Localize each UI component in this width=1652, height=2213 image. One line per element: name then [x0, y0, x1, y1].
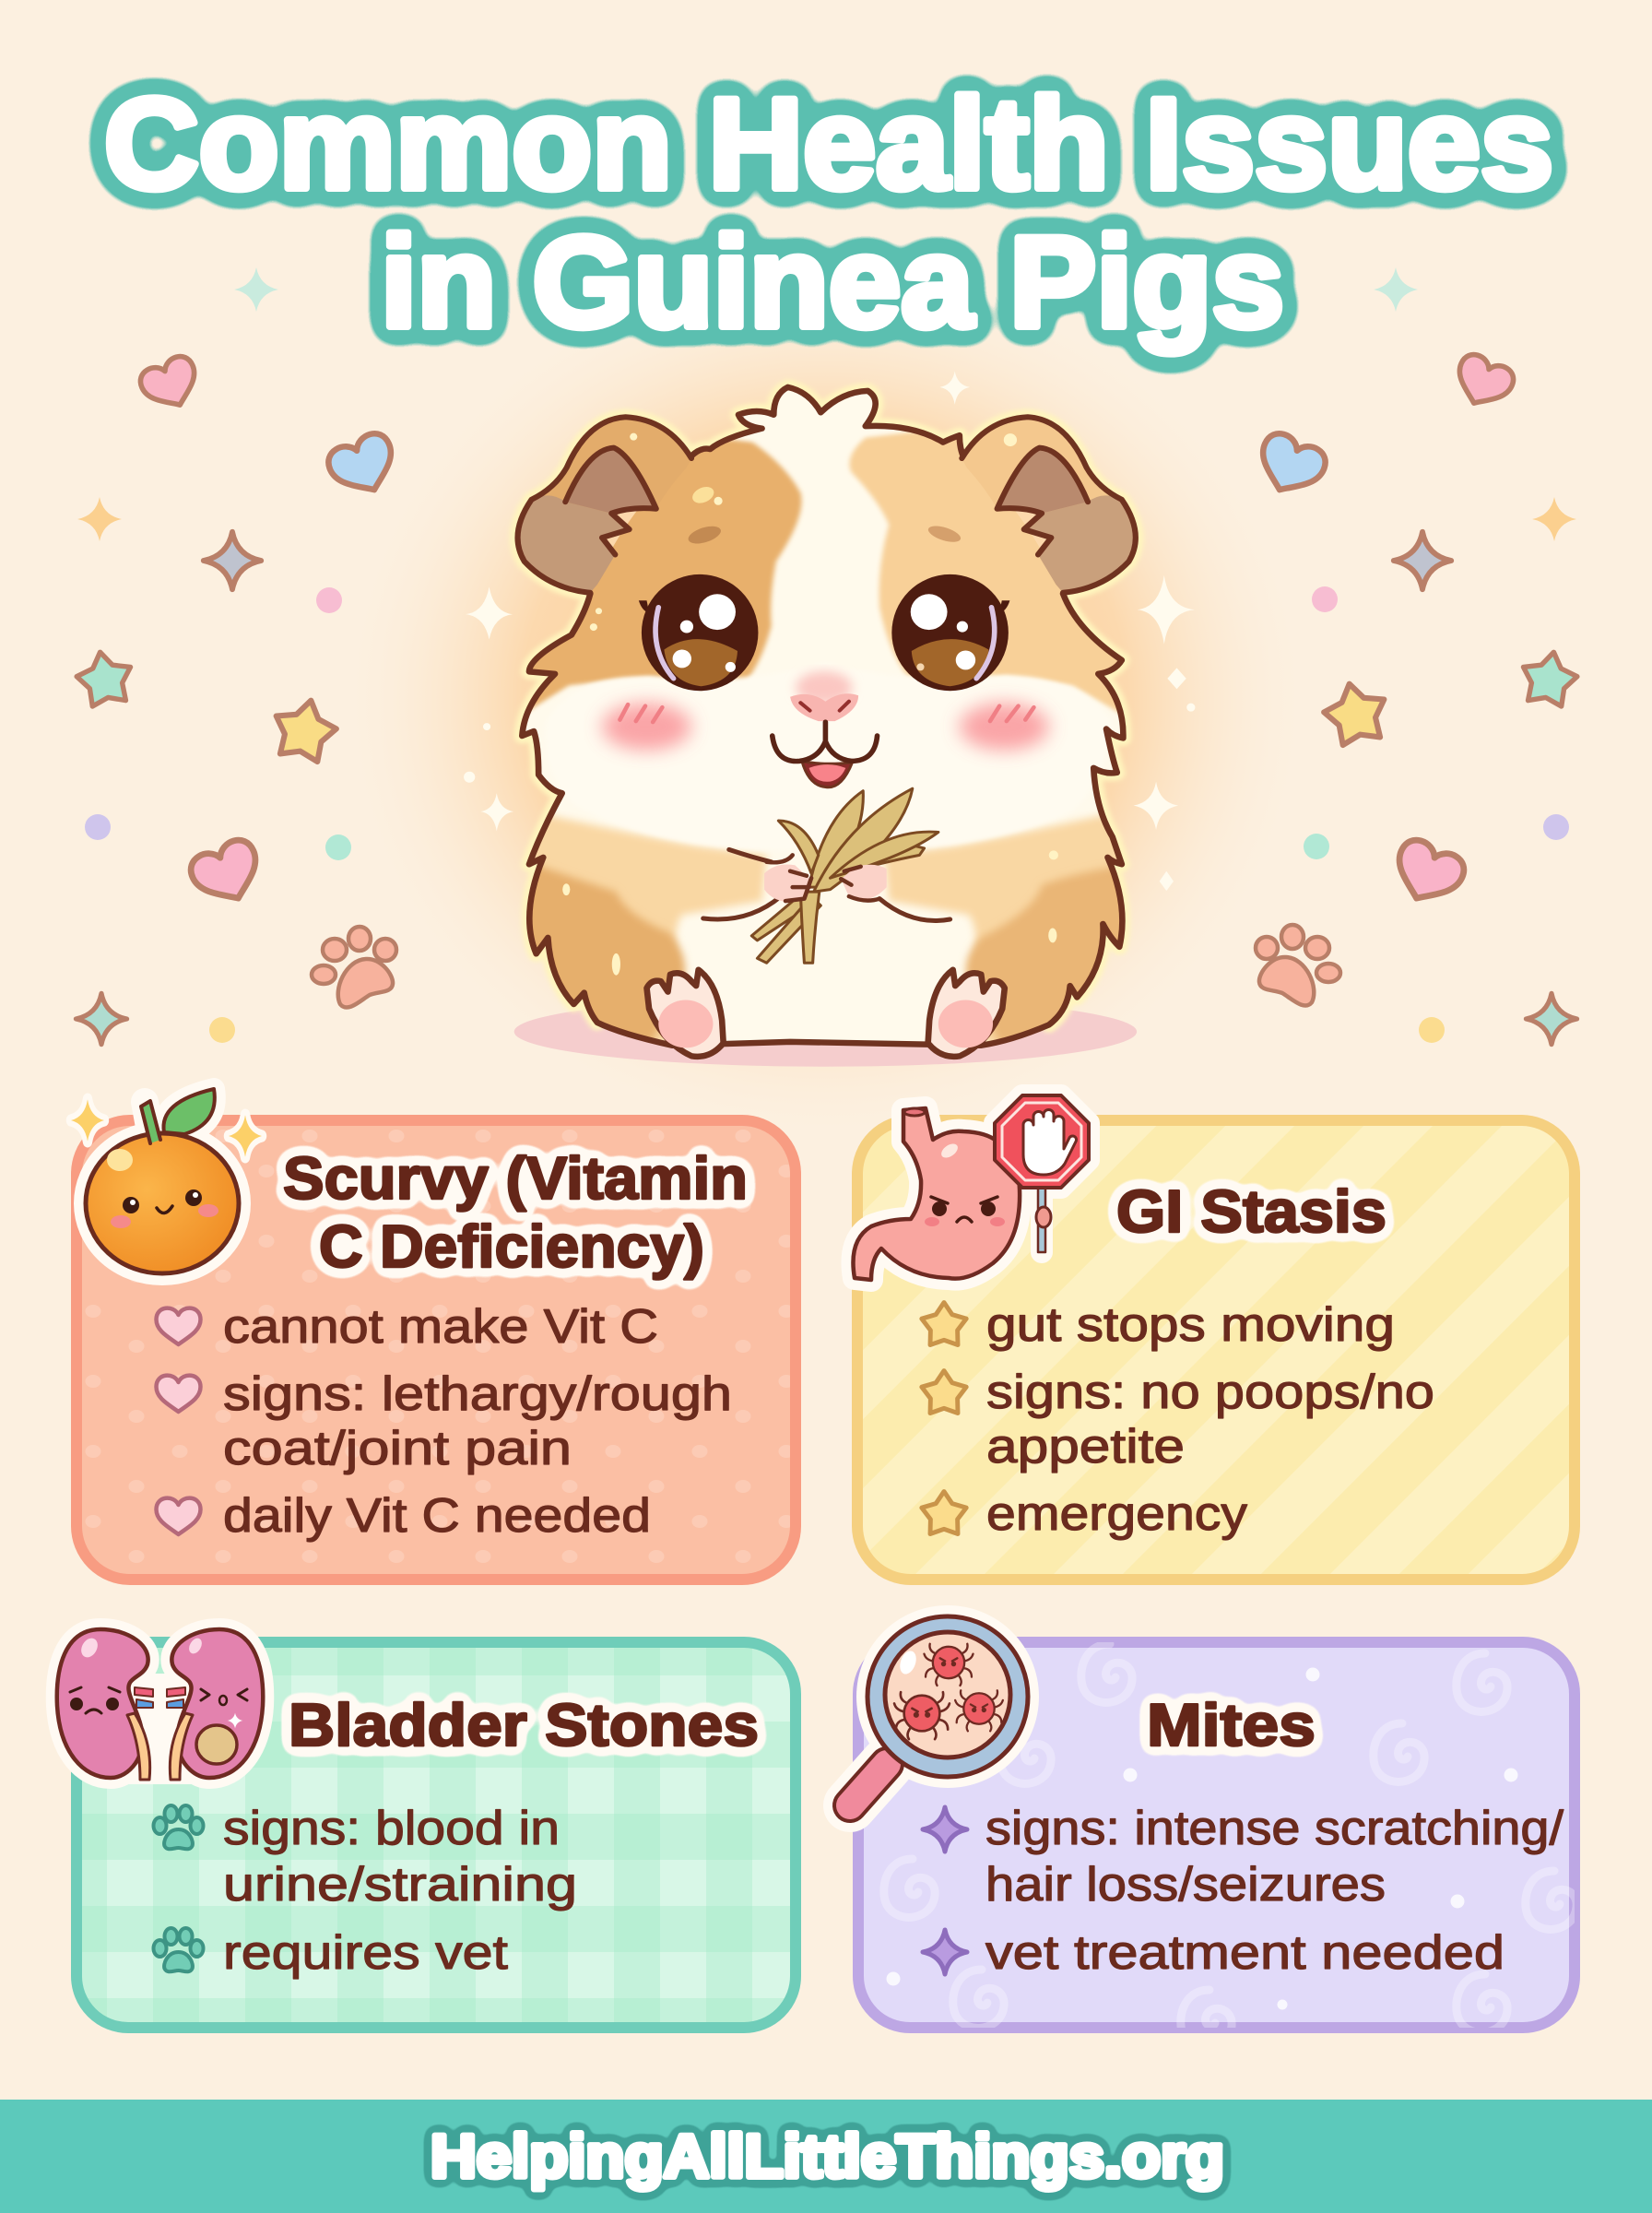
footer banner: [0, 2100, 1652, 2213]
icon: orange with sparkles: [71, 1089, 262, 1273]
left ear: [518, 417, 691, 593]
icon: magnifying glass with mites: [850, 1605, 1039, 1805]
bullet list: cannot make Vit C: [223, 1300, 658, 1354]
panel: bladder stones: [57, 1629, 796, 2028]
bullet list: [157, 1300, 732, 1543]
bullet list: signs: blood in: [223, 1802, 560, 1855]
icon: kidneys with stone: [57, 1629, 263, 1784]
heading: GI Stasis: [1116, 1178, 1386, 1245]
title: in Guinea Pigs: [381, 209, 1284, 354]
right ear: [962, 417, 1136, 593]
icon: stomach with stop sign: [853, 1095, 1089, 1280]
yellow halo around body: [518, 387, 1136, 1024]
panel: mites: [850, 1605, 1576, 2048]
bullet list: daily Vit C needed: [223, 1489, 651, 1543]
heading: Mites: [1147, 1691, 1316, 1758]
decorations: right side: [1250, 267, 1581, 1045]
body fill and fur patches: [525, 391, 1120, 1042]
heading: C Deficiency): [319, 1213, 704, 1280]
heading: Scurvy (Vitamin: [283, 1144, 748, 1212]
body outline: [522, 387, 1123, 1046]
title: [104, 71, 1553, 354]
feet: [647, 970, 724, 1057]
bullet list: signs: no poops/no: [986, 1366, 1434, 1419]
bullet list: emergency: [986, 1487, 1247, 1541]
guinea pig mascot: [464, 369, 1195, 1067]
brows and highlights: [686, 523, 723, 547]
bullet list: [923, 1802, 1564, 1980]
blush: [602, 703, 691, 751]
background glow behind guinea pig: [336, 258, 1314, 1143]
bullet list: [153, 1802, 577, 1980]
bullet list: gut stops moving: [986, 1298, 1395, 1352]
panel: scurvy: [71, 1089, 796, 1580]
bullet list: hair loss/seizures: [985, 1858, 1386, 1911]
bullet list: signs: intense scratching/: [985, 1802, 1564, 1855]
title: Common Health Issues: [104, 71, 1553, 216]
bullet list: [922, 1298, 1434, 1541]
bullet list: appetite: [986, 1420, 1185, 1473]
panel: gi stasis: [853, 1095, 1575, 1580]
hands: [764, 865, 811, 902]
bullet list: signs: lethargy/rough: [223, 1367, 732, 1421]
belly lines and arms: [703, 849, 950, 920]
eyes: [639, 574, 1009, 691]
hay bundle: [751, 788, 938, 963]
footer website text: HelpingAllLittleThings.org: [431, 2122, 1224, 2190]
bullet list: coat/joint pain: [223, 1422, 572, 1475]
bullet list: vet treatment needed: [985, 1926, 1504, 1980]
bullet list: requires vet: [223, 1926, 509, 1980]
heading: Bladder Stones: [289, 1691, 759, 1758]
bullet list: urine/straining: [223, 1858, 577, 1911]
nose and mouth: [796, 671, 852, 704]
heading: [283, 1144, 748, 1280]
decorations: left side: [73, 267, 404, 1045]
